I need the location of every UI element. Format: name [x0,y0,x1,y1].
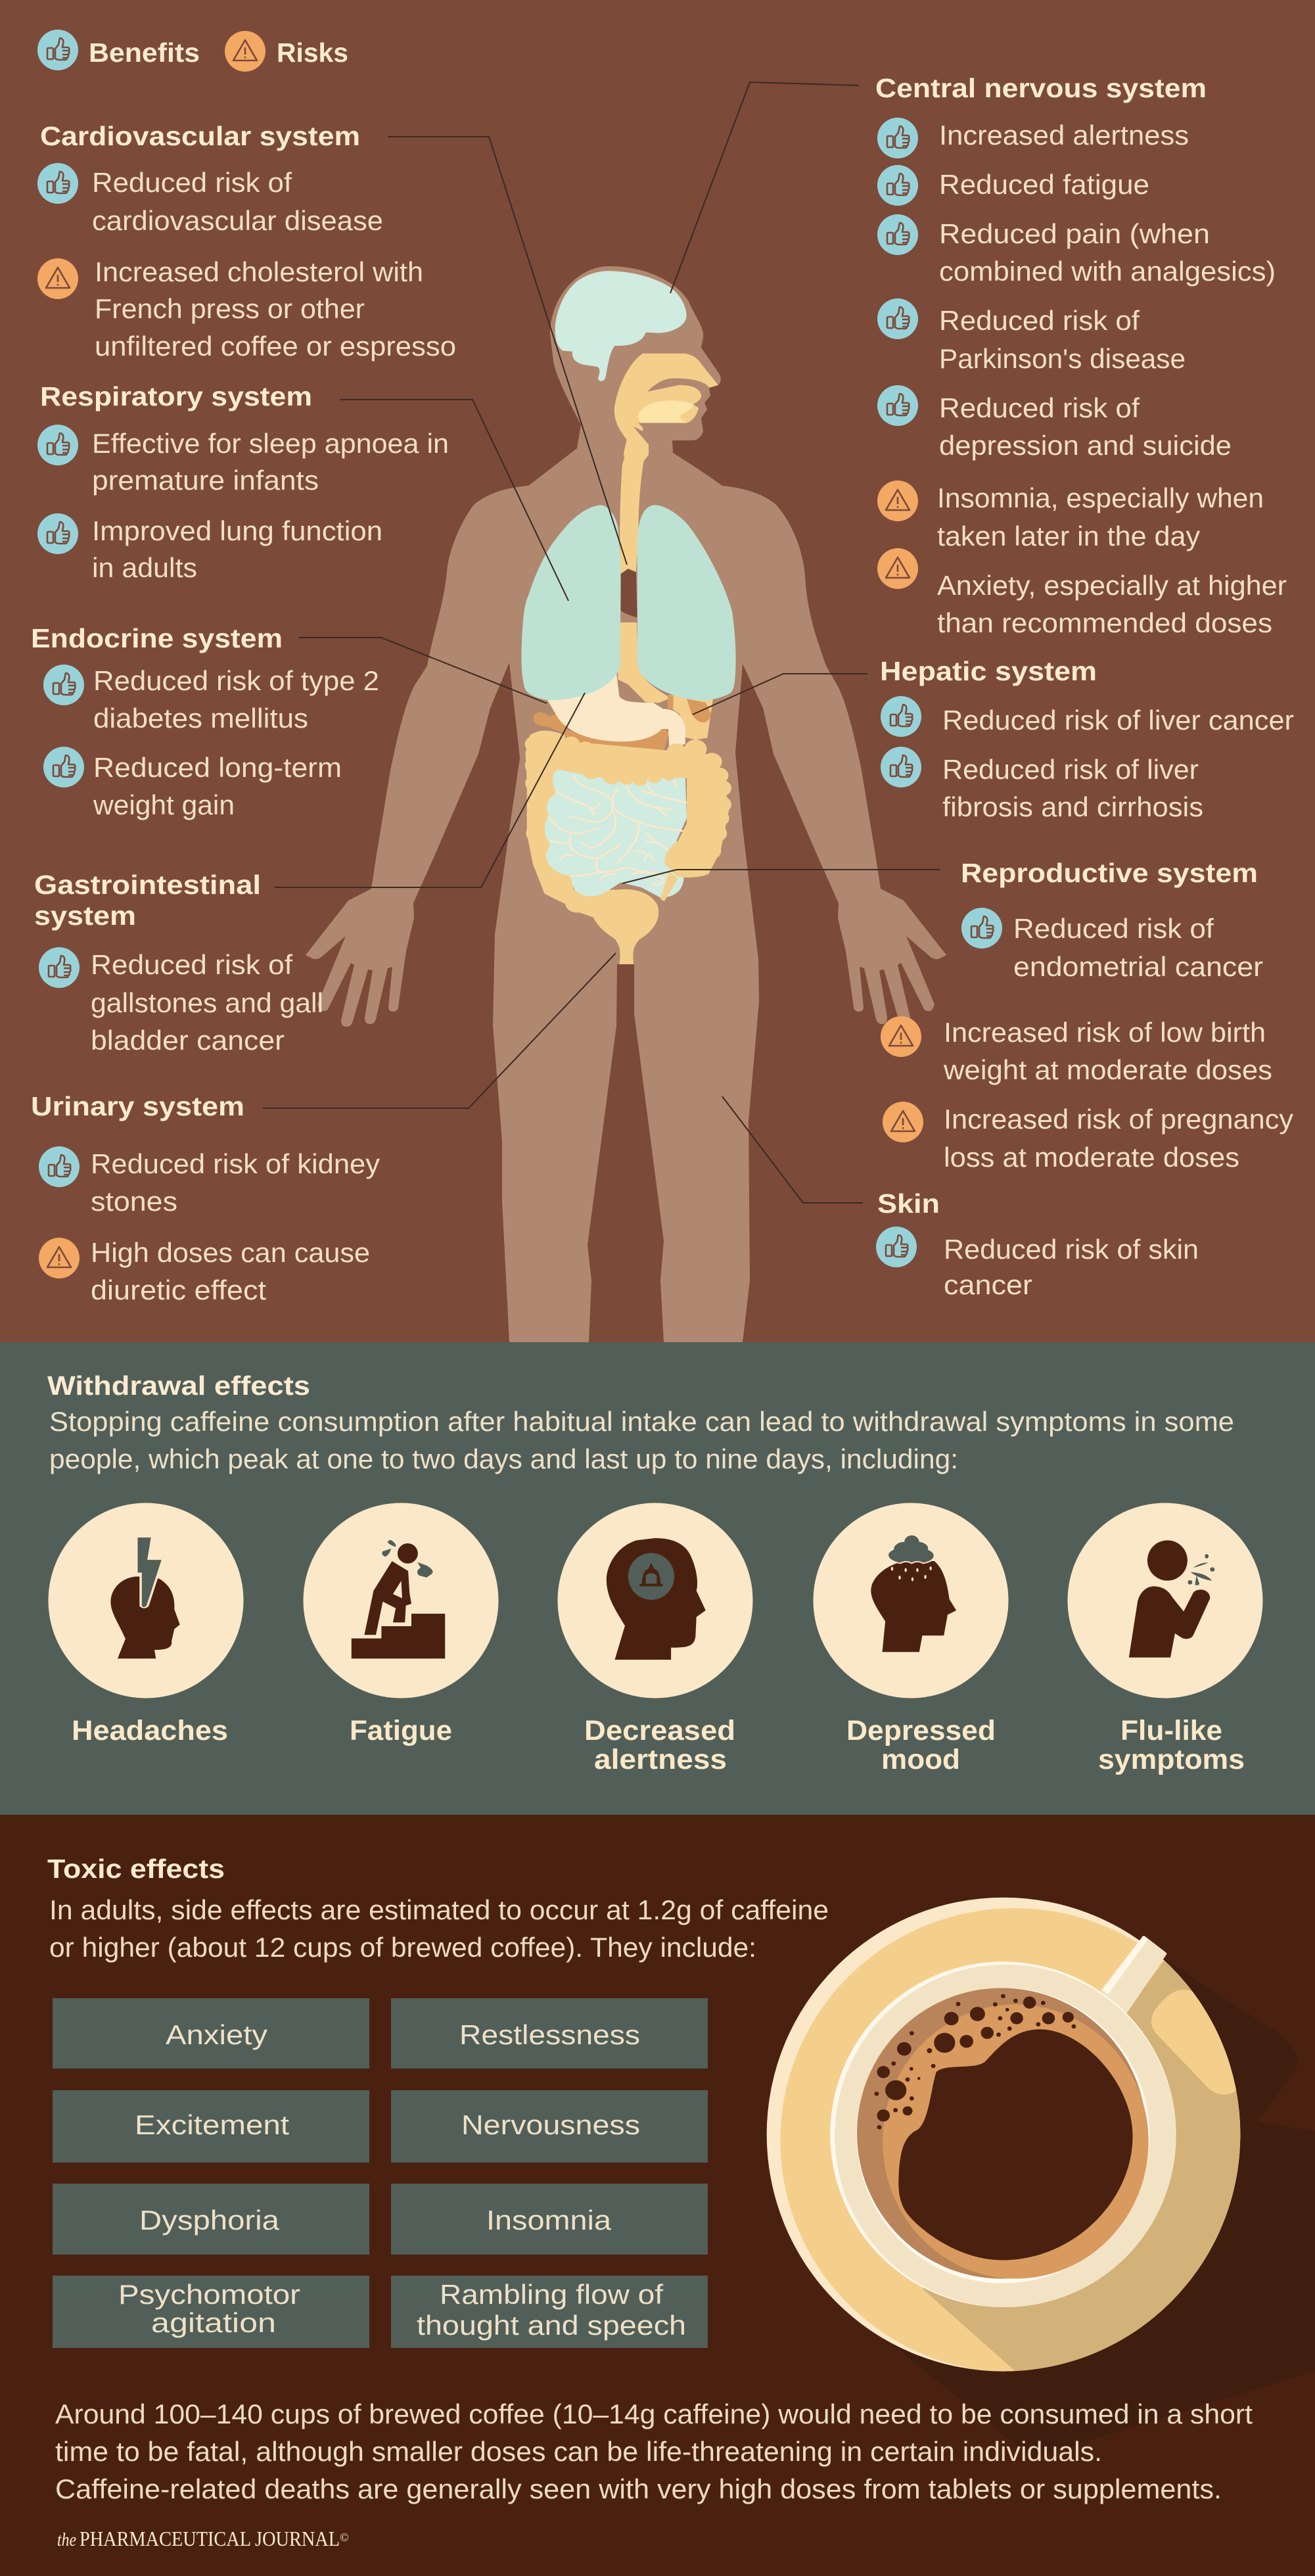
icon: benefit [43,747,84,787]
panel: withdrawal background [0,1342,1315,1815]
icon: risks [225,31,265,72]
benefit text: Reduced risk of type 2 [93,665,379,696]
coffee crema [856,1988,1149,2283]
icon: fatigue [304,1503,498,1698]
intro text [49,1406,1234,1474]
large intestine back [525,730,658,964]
benefit text: Reduced risk of [91,949,292,980]
benefit text: Increased alertness [939,120,1189,151]
risk text [943,1017,1272,1085]
icon: benefits [37,30,78,70]
risk text [937,570,1287,638]
benefit text: Effective for sleep apnoea in [92,428,449,459]
heading: Hepatic system [880,656,1097,686]
heading: Central nervous system [875,73,1207,103]
risk text: unfiltered coffee or espresso [95,331,456,362]
risk text: Anxiety, especially at higher [937,570,1287,601]
risk text [944,1104,1293,1173]
risk text: High doses can cause [91,1237,370,1268]
risk text: Increased risk of pregnancy [944,1104,1293,1135]
box: dysphoria [53,2184,369,2255]
box: rambling flow of thought and speech [391,2276,708,2348]
benefit text: endometrial cancer [1013,951,1263,982]
benefit text [92,428,449,496]
icon: benefit [39,1146,80,1187]
logo: © [340,2531,349,2544]
panel: cardiovascular system [37,121,456,362]
rectum [574,889,658,964]
illustration: coffee cup on saucer [760,1894,1252,2375]
legend [37,30,348,72]
panel: central nervous system [875,73,1287,638]
line: reproductive system [622,870,940,883]
heading: Urinary system [31,1091,244,1121]
icon: benefit [961,908,1002,948]
panel: skin [876,1188,1199,1300]
heading: Withdrawal effects [47,1370,310,1401]
benefit text: depression and suicide [939,430,1232,461]
icon: benefit [39,947,80,988]
intro text [49,1894,829,1963]
saucer [760,1894,1252,2375]
oesophagus [618,622,671,703]
box: psychomotor agitation: Psychomotor [118,2279,300,2310]
benefit text [91,949,323,1056]
benefit text [939,305,1186,374]
heading: Cardiovascular system [40,121,360,151]
risk text: loss at moderate doses [944,1142,1239,1173]
airway and trachea [614,354,718,703]
line: endocrine system [299,638,547,703]
box: insomnia [391,2184,708,2255]
large intestine front [556,737,731,901]
heart gap [621,569,637,617]
benefit text: Reduced risk of [1013,913,1214,944]
box: dysphoria: Dysphoria [139,2205,280,2236]
heading: Reproductive system [961,858,1258,888]
box: anxiety [53,1998,369,2069]
intro text: In adults, side effects are estimated to occur at 1.2g of caffeine [49,1894,829,1925]
icon: depressed mood [814,1503,1008,1698]
panel: toxic effects [47,1854,1253,2550]
box: restlessness [391,1998,708,2069]
icon: risk [39,1238,80,1278]
cup rim [830,1961,1176,2307]
icon: benefit [876,1227,917,1267]
label: depressed mood: mood [881,1744,960,1775]
icon: benefit [877,165,918,206]
panel: gastrointestinal system [34,870,323,1056]
label: depressed mood [846,1715,996,1775]
risk text: than recommended doses [937,607,1272,638]
benefit text: Reduced pain (when [939,218,1210,249]
benefit text: Reduced risk of liver cancer [942,705,1294,736]
benefit text: Reduced risk of [939,392,1140,423]
logo: the [57,2530,76,2550]
benefit text: in adults [92,552,197,583]
benefit text: Parkinson's disease [939,343,1186,374]
icon: benefit [43,665,84,705]
closing text [55,2399,1253,2504]
illustration: cup shadow [893,1960,1315,2458]
heading: Toxic effects [47,1854,225,1884]
icon: risk [883,1102,923,1142]
brain [555,271,687,381]
benefit text [942,754,1203,822]
icon: benefit [881,696,921,737]
icon: benefit [37,513,78,554]
box: nervousness [391,2090,708,2163]
panel: body systems background [0,0,1315,1342]
closing text: Around 100–140 cups of brewed coffee (10–14g caffeine) would need to be consumed in a short [55,2399,1253,2429]
legend label: benefits: Benefits [89,37,200,68]
box: restlessness: Restlessness [459,2019,640,2050]
risk text: taken later in the day [937,521,1200,551]
lungs [521,505,736,701]
benefit text: fibrosis and cirrhosis [942,791,1203,822]
panel: reproductive system [881,858,1293,1173]
benefit text: Reduced fatigue [939,169,1149,200]
line: urinary system [263,953,616,1108]
benefit text [939,392,1232,461]
heading: system [34,901,136,931]
benefit text: weight gain [93,789,235,820]
benefit text: premature infants [92,465,319,496]
benefit text: combined with analgesics) [939,256,1276,287]
line: gastrointestinal system [275,693,585,887]
benefit text: Improved lung function [92,515,382,546]
benefit text [93,752,342,820]
label: headaches: Headaches [72,1715,228,1746]
stomach and upper digestive organs [534,672,713,757]
box: anxiety: Anxiety [166,2019,267,2050]
risk text: Insomnia, especially when [937,482,1264,513]
benefit text: gallstones and gall [91,987,323,1018]
box: excitement: Excitement [135,2109,289,2140]
internal organs [521,271,736,964]
line: skin [722,1096,863,1203]
box: rambling flow of thought and speech: Rambling flow of [440,2279,663,2310]
benefit text: bladder cancer [91,1025,285,1056]
benefit text [92,167,383,236]
risk text: diuretic effect [91,1275,266,1305]
box: nervousness: Nervousness [461,2109,640,2140]
line: hepatic system [693,674,867,714]
box: rambling flow of thought and speech: thought and speech [417,2310,686,2341]
icon: headaches [49,1503,243,1698]
icon: decreased alertness [557,1503,753,1698]
label: decreased alertness: alertness [594,1744,727,1775]
tongue [638,400,693,423]
benefit text: stones [91,1186,177,1217]
icon: benefit [877,214,918,255]
benefit text: Reduced risk of skin [944,1234,1199,1265]
risk text: weight at moderate doses [943,1054,1272,1085]
intro text: people, which peak at one to two days and last up to nine days, including: [49,1443,958,1474]
benefit text: Reduced risk of [92,167,292,198]
risk text [937,482,1264,551]
risk text: Increased risk of low birth [944,1017,1266,1048]
benefit text: diabetes mellitus [93,703,308,734]
benefit text [92,515,382,583]
heading [34,870,261,931]
legend label: risks: Risks [277,37,348,68]
panel: withdrawal effects [47,1370,1263,1775]
icon: benefit [877,118,918,158]
logo: PHARMACEUTICAL JOURNAL [80,2527,340,2550]
heading: Endocrine system [31,623,283,653]
closing text: Caffeine-related deaths are generally seen with very high doses from tablets or supplements. [55,2473,1222,2504]
icon: risk [37,258,78,299]
cup handle [1103,1937,1165,2011]
benefit text [93,665,379,734]
heading: Respiratory system [40,381,312,411]
panel: toxic background [0,1815,1315,2576]
intro text: Stopping caffeine consumption after habitual intake can lead to withdrawal symptoms in some [49,1406,1234,1437]
icon: benefit [877,298,918,339]
icon: risk [881,1016,921,1057]
panel: respiratory system [37,381,449,583]
box: psychomotor agitation: agitation [151,2307,276,2338]
risk text [95,256,456,362]
benefit text [944,1234,1199,1300]
box: excitement [53,2090,369,2163]
risk text: French press or other [95,293,365,324]
benefit text [1013,913,1263,982]
benefit text: Reduced risk of [939,305,1140,336]
heading: Gastrointestinal [34,870,261,900]
line: respiratory system [340,400,568,601]
risk text [91,1237,370,1305]
icon: risk [877,548,918,589]
line: cardiovascular system [388,137,627,565]
label: flu-like symptoms: Flu-like [1120,1715,1222,1746]
icon: benefit [37,425,78,465]
label: flu-like symptoms [1098,1715,1245,1775]
panel: urinary system [31,1091,380,1305]
benefit text: Reduced risk of kidney [91,1148,380,1179]
benefit text [939,218,1276,287]
label: decreased alertness: Decreased [584,1715,735,1746]
label: fatigue: Fatigue [350,1715,452,1746]
box: insomnia: Insomnia [486,2205,612,2236]
icon: benefit [877,385,918,426]
label: decreased alertness [584,1715,735,1775]
intro text: or higher (about 12 cups of brewed coffee). They include: [49,1932,756,1963]
line: central nervous system [670,82,859,293]
coffee surface [898,2029,1133,2260]
benefit text: cancer [944,1269,1032,1300]
risk text: Increased cholesterol with [95,256,423,287]
icon: benefit [37,163,78,204]
benefit text: Reduced risk of liver [942,754,1199,785]
icon: benefit [881,747,921,787]
panel: endocrine system [31,623,379,820]
label: flu-like symptoms: symptoms [1098,1744,1245,1775]
small intestine [545,769,687,897]
benefit text [91,1148,380,1217]
human body silhouette [306,266,946,1342]
benefit text: Reduced long-term [93,752,342,783]
icon: flu-like symptoms [1067,1503,1263,1698]
label: depressed mood: Depressed [846,1715,996,1746]
closing text: time to be fatal, although smaller doses can be life-threatening in certain individuals. [55,2436,1102,2467]
icon: risk [877,480,918,521]
callout lines [263,82,940,1203]
heading: Skin [877,1188,940,1219]
benefit text: cardiovascular disease [92,205,383,236]
coffee bubbles [874,1994,1076,2130]
panel: hepatic system [880,656,1294,822]
box: psychomotor agitation [53,2276,369,2348]
